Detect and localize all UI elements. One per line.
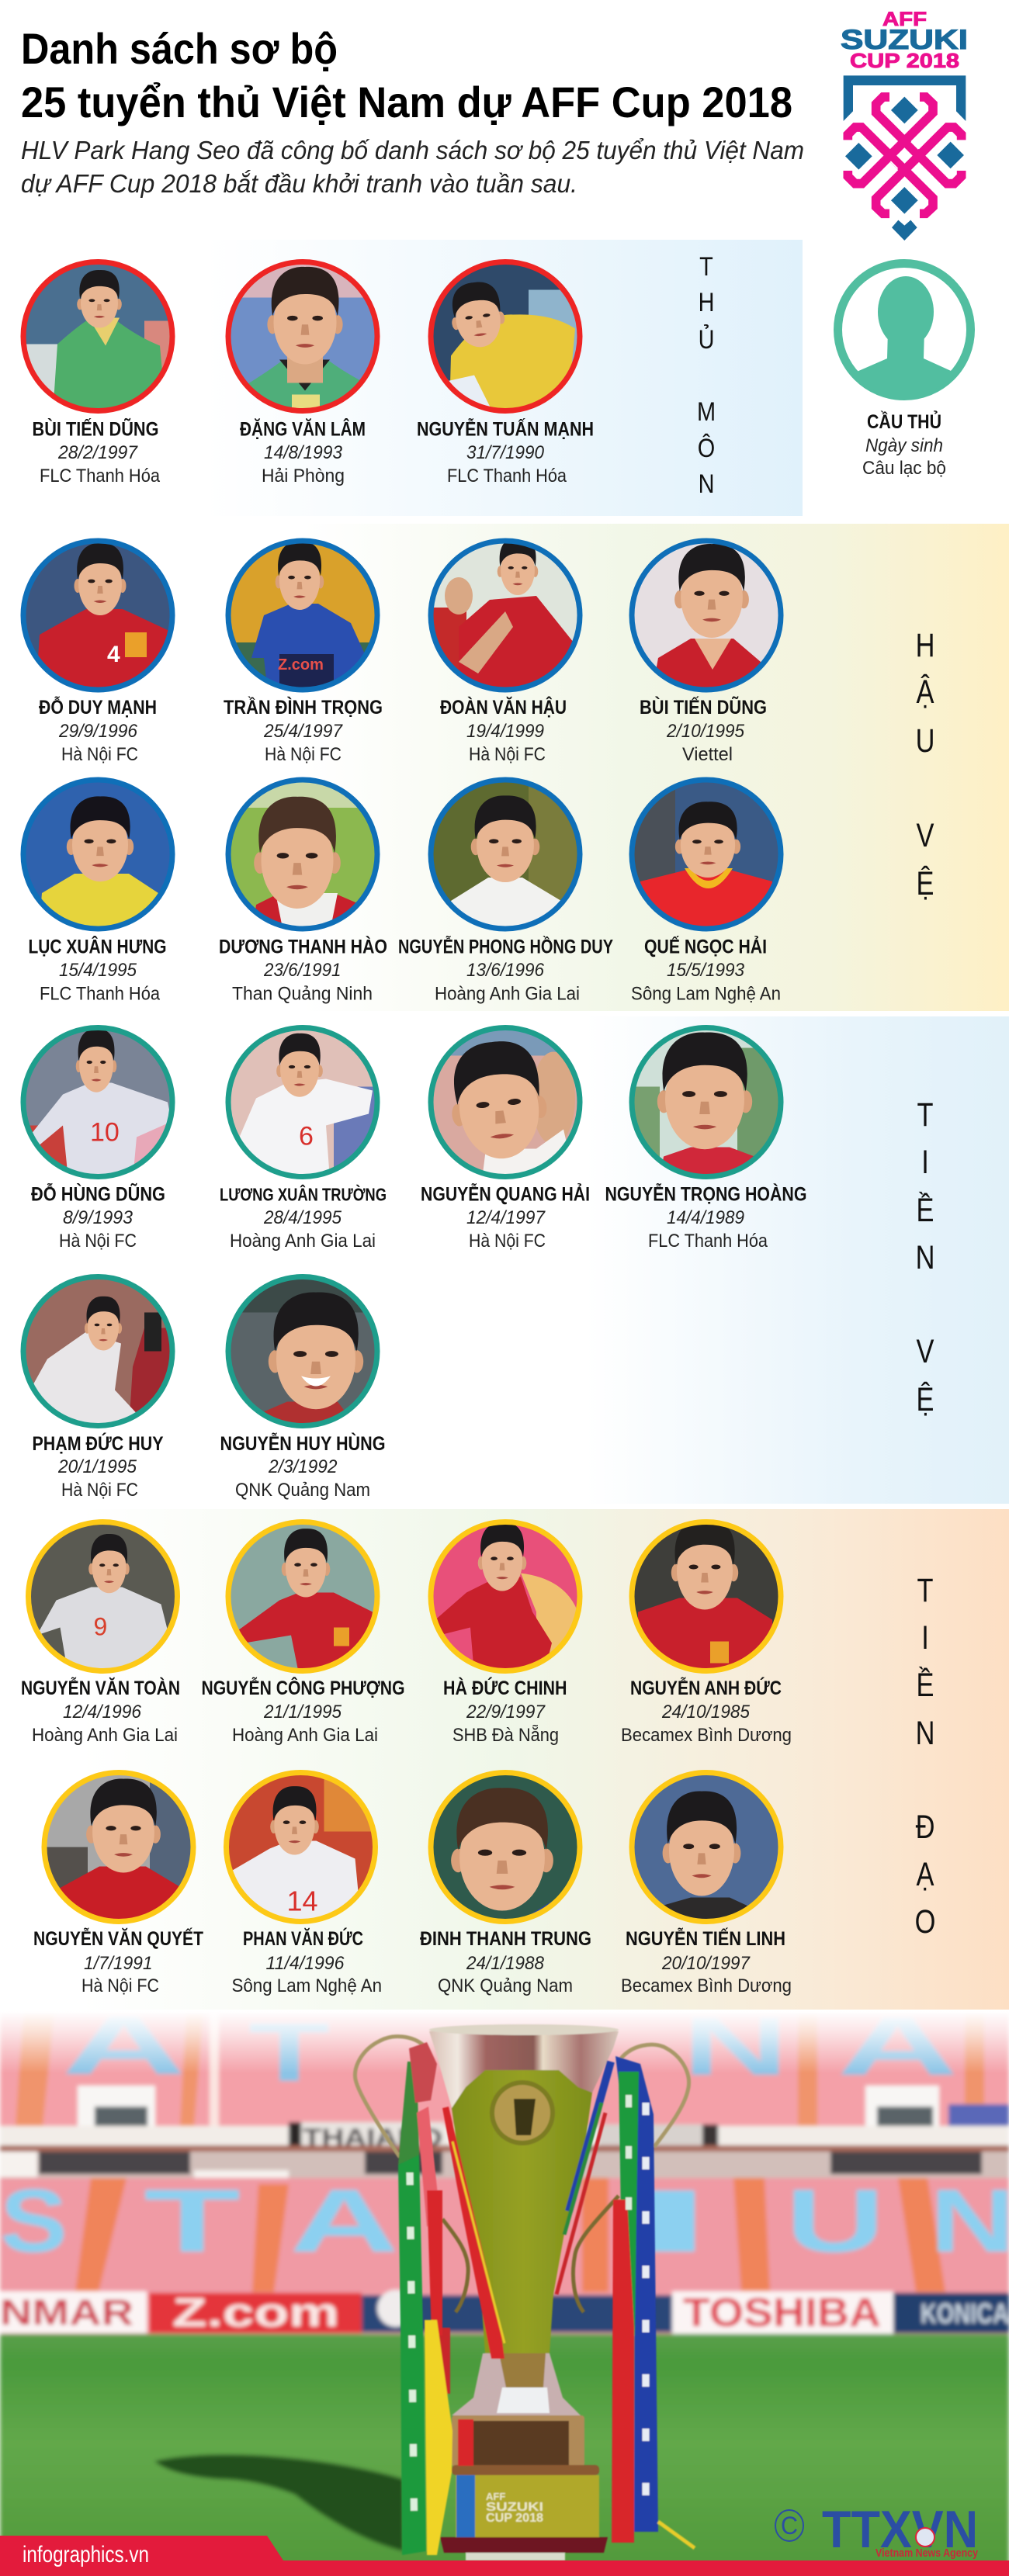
player: Bùi Tiến Dũng (thủ môn): BÙI TIẾN DŨNG [33,417,158,441]
player: Đỗ Duy Mạnh: ĐỖ DUY MẠNH [39,695,157,718]
player: Nguyễn Trọng Hoàng: NGUYỄN TRỌNG HOÀNG [605,1182,807,1206]
player: Lương Xuân Trường: 6 [299,1122,314,1151]
player: Nguyễn Công Phượng: NGUYỄN CÔNG PHƯỢNG [202,1676,405,1699]
player: Nguyễn Quang Hải: NGUYỄN QUANG HẢI [421,1182,590,1206]
player: Nguyễn Anh Đức: NGUYỄN ANH ĐỨC [630,1676,782,1699]
photo: stadium background: A [61,1998,186,2093]
player: Nguyễn Anh Đức: Becamex Bình Dương [621,1725,792,1746]
legend: cầu thủ [834,264,975,479]
player: Nguyễn Quang Hải: 12/4/1997 [466,1207,546,1228]
player: Đỗ Duy Mạnh: Hà Nội FC [61,744,138,765]
label: TIỀN ĐẠO: N [916,1715,934,1752]
photo: stadium background: NMAR [0,2292,133,2332]
player: Nguyễn Phong Hồng Duy: NGUYỄN PHONG HỒNG DUY [398,934,613,957]
player: Nguyễn Công Phượng: 21/1/1995 [263,1702,342,1723]
player: Phạm Đức Huy [20,1274,175,1501]
player: Nguyễn Tuấn Mạnh: FLC Thanh Hóa [447,466,567,486]
player: Nguyễn Tiến Linh: NGUYỄN TIẾN LINH [626,1927,785,1950]
photo: stadium background: N [682,1999,789,2093]
player: Nguyễn Công Phượng [202,1519,405,1746]
player: Hà Đức Chinh [428,1519,583,1746]
label: TIỀN ĐẠO: Đ [916,1809,934,1846]
player: Bùi Tiến Dũng (thủ môn) [20,259,175,486]
panel: tiền đạo background [0,1509,1009,2010]
intro text: HLV Park Hang Seo đã công bố danh sách sơ bộ 25 tuyển thủ Việt Nam [21,136,804,164]
player: Nguyễn Công Phượng: Hoàng Anh Gia Lai [232,1725,378,1746]
label: TIỀN ĐẠO: Ạ [917,1856,934,1893]
photo: stadium background: N [930,2170,1009,2271]
player: Phan Văn Đức: 14 [287,1885,318,1916]
player: Quế Ngọc Hải: Sông Lam Nghệ An [631,984,781,1004]
player: Nguyễn Văn Toàn: 12/4/1996 [63,1702,142,1723]
photo: stadium background: S [0,2170,68,2271]
player: Đỗ Hùng Dũng: Hà Nội FC [59,1231,137,1252]
player: Lục Xuân Hưng: 15/4/1995 [59,960,137,981]
player: Trần Đình Trọng: Z.com [278,656,324,673]
player: Lương Xuân Trường [220,1024,387,1252]
player: Dương Thanh Hào: 23/6/1991 [263,960,342,981]
label: THỦ MÔN [697,251,716,499]
player: Phan Văn Đức: 11/4/1996 [265,1953,345,1974]
player: Nguyễn Tiến Linh: 20/10/1997 [661,1953,751,1974]
label: TIỀN VỆ: Ệ [917,1381,934,1418]
label: TIỀN ĐẠO: T [917,1572,934,1609]
player: Quế Ngọc Hải [629,777,784,1004]
label: THỦ MÔN: T [699,251,713,282]
legend: cầu thủ: Câu lạc bộ [862,458,946,479]
trophy handles [355,2037,689,2312]
player: Nguyễn Văn Toàn [21,1519,180,1746]
label: TIỀN VỆ: V [917,1333,934,1370]
player: Nguyễn Văn Toàn: 9 [93,1612,107,1640]
player: Đặng Văn Lâm: 14/8/1993 [264,442,343,463]
logo: AFF Suzuki Cup 2018: CUP 2018 [850,49,959,72]
player: Quế Ngọc Hải: 15/5/1993 [667,960,745,981]
player: Đỗ Duy Mạnh: 29/9/1996 [58,721,138,742]
player: Nguyễn Huy Hùng: QNK Quảng Nam [235,1480,370,1501]
footer bar [0,2536,1009,2576]
player: Nguyễn Phong Hồng Duy [398,777,613,1004]
logo: TTXVN watermark: Vietnam News Agency [876,2547,979,2560]
player: Bùi Tiến Dũng (hậu vệ) [629,538,784,765]
player: Đoàn Văn Hậu: ĐOÀN VĂN HẬU [440,695,567,718]
label: TIỀN ĐẠO: Ề [917,1666,934,1704]
player: Phan Văn Đức [224,1769,382,1996]
intro text [21,136,804,198]
logo: TTXVN watermark: C [781,2512,798,2540]
trophy cup body [435,2037,613,2353]
intro text: dự AFF Cup 2018 bắt đầu khởi tranh vào tuần sau. [21,169,577,198]
player: Đỗ Duy Mạnh [20,538,175,765]
trophy neck [452,2353,581,2415]
player: Trần Đình Trọng [224,538,383,765]
player: Nguyễn Anh Đức: 24/10/1985 [661,1702,751,1723]
player: Nguyễn Tuấn Mạnh: 31/7/1990 [466,442,545,463]
player: Nguyễn Tiến Linh: Becamex Bình Dương [621,1975,792,1996]
player: Nguyễn Văn Toàn: Hoàng Anh Gia Lai [32,1725,178,1746]
label: HẬU VỆ: U [916,722,934,760]
player: Đoàn Văn Hậu [428,538,583,765]
player: Phan Văn Đức: PHAN VĂN ĐỨC [243,1927,363,1950]
player: Nguyễn Văn Quyết [33,1769,203,1996]
photo: stadium background: A [837,1999,959,2093]
title: Danh sách sơ bộ [21,24,338,73]
label: HẬU VỆ: V [917,817,934,854]
player: Nguyễn Tiến Linh [621,1769,792,1996]
player: Nguyễn Huy Hùng [220,1274,385,1501]
label: HẬU VỆ: Ậ [917,673,934,711]
player: Lục Xuân Hưng [20,777,175,1004]
photo: stadium background: T [144,2170,241,2271]
panel: tiền vệ background [0,1016,1009,1504]
player: Nguyễn Quang Hải [421,1024,590,1252]
player: Hà Đức Chinh: 22/9/1997 [466,1702,546,1723]
player: Nguyễn Trọng Hoàng [605,1024,807,1252]
player: Lục Xuân Hưng: FLC Thanh Hóa [40,984,161,1004]
panel: hậu vệ background [0,524,1009,1011]
player: Nguyễn Tuấn Mạnh: NGUYỄN TUẤN MẠNH [417,417,594,441]
label: HẬU VỆ: Ệ [917,865,934,902]
player: Hà Đức Chinh: HÀ ĐỨC CHINH [443,1676,567,1699]
label: TIỀN VỆ: I [921,1144,929,1181]
player: Đinh Thanh Trung [420,1769,591,1996]
trophy base [440,2415,608,2560]
label: THỦ MÔN: N [699,469,714,499]
photo: stadium background: Z.com [172,2290,339,2335]
label: THỦ MÔN: M [697,396,716,427]
label: THỦ MÔN: Ủ [699,324,714,355]
player: Lương Xuân Trường: 28/4/1995 [263,1207,342,1228]
player: Bùi Tiến Dũng (hậu vệ): Viettel [682,744,733,765]
ribbons [398,2042,695,2555]
player: Trần Đình Trọng: TRẦN ĐÌNH TRỌNG [224,696,383,718]
player: Bùi Tiến Dũng (hậu vệ): 2/10/1995 [666,721,745,742]
player: Nguyễn Phong Hồng Duy: Hoàng Anh Gia Lai [435,984,580,1004]
logo: AFF Suzuki Cup 2018 [841,9,968,241]
player: Đặng Văn Lâm: ĐẶNG VĂN LÂM [240,417,366,441]
player: Dương Thanh Hào [219,777,387,1004]
player: Đặng Văn Lâm: Hải Phòng [262,466,345,486]
player: Nguyễn Văn Quyết: 1/7/1991 [84,1953,152,1974]
player: Nguyễn Trọng Hoàng: 14/4/1989 [667,1207,744,1228]
panel: thủ môn background [206,240,803,516]
label: TIỀN VỆ: N [916,1239,934,1276]
footer text: infographics.vn [23,2542,149,2567]
photo: stadium background: T [248,2005,330,2100]
title [21,24,792,126]
label: TIỀN ĐẠO: I [921,1619,929,1657]
legend: cầu thủ: Ngày sinh [865,435,943,456]
player: Lương Xuân Trường: Hoàng Anh Gia Lai [230,1231,376,1252]
player: Đinh Thanh Trung: 24/1/1988 [466,1953,545,1974]
player: Phạm Đức Huy: PHẠM ĐỨC HUY [33,1432,164,1455]
photo: stadium background [0,1998,1009,2576]
player: Dương Thanh Hào: DƯƠNG THANH HÀO [219,936,387,957]
player: Nguyễn Phong Hồng Duy: 13/6/1996 [466,960,545,981]
trophy base: AFF [486,2491,505,2502]
title: 25 tuyển thủ Việt Nam dự AFF Cup 2018 [21,78,792,126]
player: Đoàn Văn Hậu: 19/4/1999 [466,721,544,742]
player: Nguyễn Tuấn Mạnh [417,259,594,486]
label: TIỀN VỆ: T [917,1096,934,1134]
player: Trần Đình Trọng: Hà Nội FC [265,744,342,765]
player: Nguyễn Văn Toàn: NGUYỄN VĂN TOÀN [21,1676,180,1699]
player: Dương Thanh Hào: Than Quảng Ninh [232,984,373,1004]
player: Nguyễn Huy Hùng: 2/3/1992 [268,1456,337,1477]
player: Phan Văn Đức: Sông Lam Nghệ An [231,1975,382,1996]
player: Đỗ Hùng Dũng [20,1024,175,1252]
player: Đỗ Hùng Dũng: 8/9/1993 [63,1207,133,1228]
legend: cầu thủ: CẦU THỦ [867,410,941,433]
player: Đỗ Hùng Dũng: 10 [90,1117,120,1147]
player: Trần Đình Trọng: 25/4/1997 [263,721,344,742]
medallion [490,2080,555,2145]
player: Nguyễn Văn Quyết: NGUYỄN VĂN QUYẾT [33,1927,203,1950]
label: TIỀN ĐẠO: O [915,1903,935,1941]
player: Quế Ngọc Hải: QUẾ NGỌC HẢI [644,934,767,957]
logo: AFF Suzuki Cup 2018: AFF [882,9,927,30]
player: Đỗ Duy Mạnh: 4 [107,642,120,667]
trophy base: CUP 2018 [486,2512,543,2525]
player: Nguyễn Huy Hùng: NGUYỄN HUY HÙNG [220,1432,385,1455]
photo: stadium background: U [785,2170,885,2271]
label: THỦ MÔN: Ô [698,433,715,463]
player: Nguyễn Anh Đức [621,1519,792,1746]
illustration: trophy [355,2024,695,2560]
player: Nguyễn Trọng Hoàng: FLC Thanh Hóa [648,1231,768,1252]
player: Hà Đức Chinh: SHB Đà Nẵng [452,1724,559,1746]
player: Đoàn Văn Hậu: Hà Nội FC [469,744,546,765]
photo: stadium background: TOSHIBA [683,2290,881,2335]
player: Lương Xuân Trường: LƯƠNG XUÂN TRƯỜNG [220,1184,387,1204]
label: TIỀN VỆ [916,1096,934,1418]
cup reflection [429,2026,619,2108]
player: Đặng Văn Lâm [225,259,380,486]
player: Phạm Đức Huy: 20/1/1995 [57,1456,137,1477]
player: Đỗ Hùng Dũng: ĐỖ HÙNG DŨNG [31,1182,165,1206]
label: THỦ MÔN: H [699,287,714,317]
photo: stadium background: THAIAND [303,2124,442,2152]
photo: stadium background: A [290,2170,399,2271]
player: Nguyễn Quang Hải: Hà Nội FC [469,1231,546,1252]
player: Phạm Đức Huy: Hà Nội FC [61,1480,138,1501]
trophy base: SUZUKI [486,2501,543,2514]
label: TIỀN VỆ: Ề [917,1191,934,1229]
player: Bùi Tiến Dũng (thủ môn): 28/2/1997 [57,442,139,463]
player: Nguyễn Văn Quyết: Hà Nội FC [81,1975,159,1996]
player: Lục Xuân Hưng: LỤC XUÂN HƯNG [28,934,166,957]
label: HẬU VỆ [916,627,934,902]
player: Đinh Thanh Trung: QNK Quảng Nam [438,1975,573,1996]
logo: TTXVN watermark: TTXVN [822,2500,978,2559]
logo: AFF Suzuki Cup 2018: SUZUKI [841,25,968,55]
player: Bùi Tiến Dũng (hậu vệ): BÙI TIẾN DŨNG [640,695,767,718]
label: HẬU VỆ: H [916,627,934,664]
label: TIỀN ĐẠO [915,1572,935,1941]
player: Đinh Thanh Trung: ĐINH THANH TRUNG [420,1928,591,1950]
player: Bùi Tiến Dũng (thủ môn): FLC Thanh Hóa [40,466,161,486]
